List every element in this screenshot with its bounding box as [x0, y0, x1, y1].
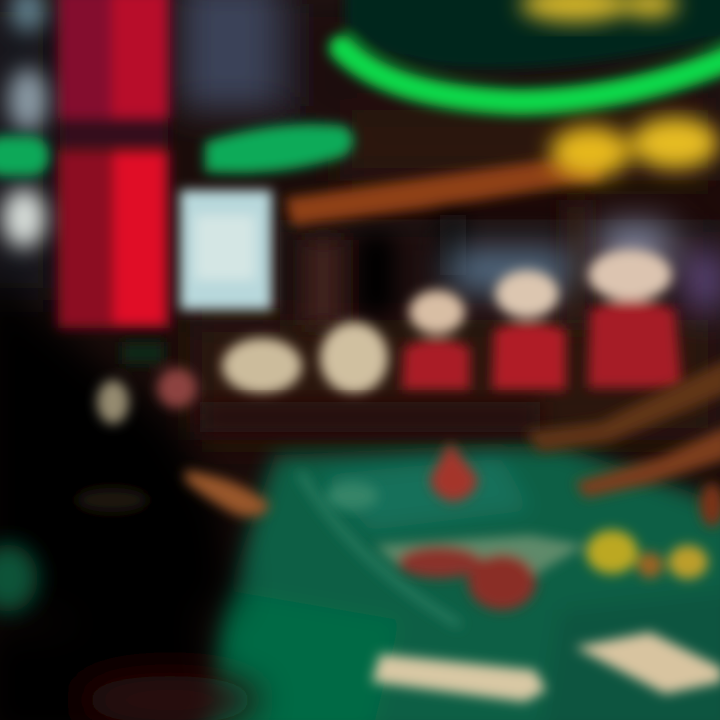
red column [58, 0, 170, 328]
seated dealer figures [222, 249, 682, 394]
left column lights [2, 0, 48, 248]
playing cards [372, 632, 720, 702]
red bottle on table [430, 442, 478, 502]
left dark silhouette [0, 265, 260, 720]
figure: right [588, 249, 682, 388]
figure: middle right [492, 270, 566, 390]
right wooden rails [525, 358, 720, 527]
table edge dark band [200, 402, 540, 432]
figure: white shirt [320, 322, 388, 394]
background wall [0, 0, 720, 440]
dark gaps and posts [305, 200, 586, 330]
pale blue panel [180, 190, 272, 310]
green neon left [0, 136, 49, 176]
yellow lamps [550, 117, 719, 178]
silhouette highlights [76, 342, 270, 517]
pale felt marking [326, 482, 378, 510]
green neon mid [205, 124, 354, 173]
figure: white shirt left [222, 338, 302, 394]
left green floor patch [0, 544, 38, 612]
green table felt [195, 445, 720, 720]
large green neon arc [342, 0, 720, 102]
figure: middle [402, 290, 470, 390]
chips pile [375, 530, 708, 610]
bluish glow behind figures [450, 225, 720, 310]
pale felt arc [300, 472, 460, 625]
orange beam [285, 152, 600, 226]
top yellow lights [520, 0, 678, 22]
